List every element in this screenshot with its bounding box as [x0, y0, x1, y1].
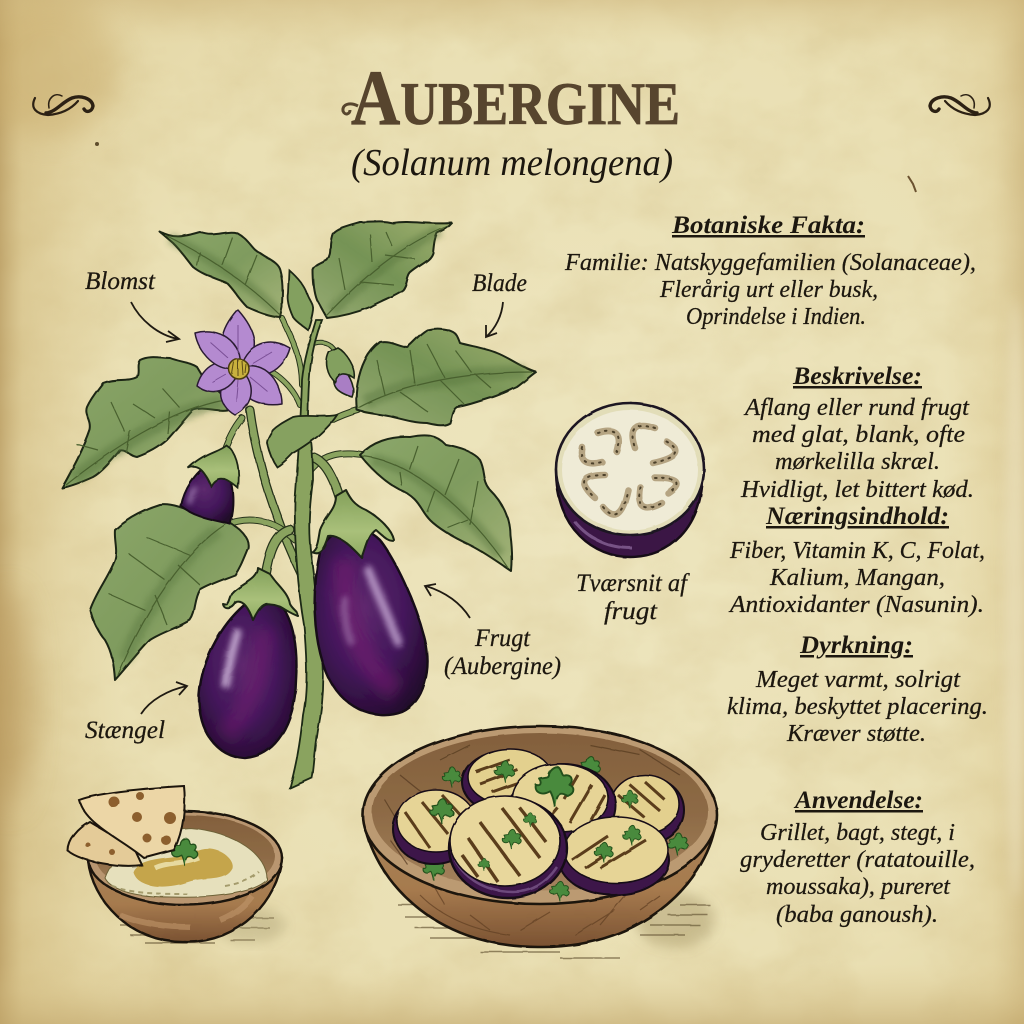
text: Beskrivelse: mørkelilla skræl.: [775, 449, 940, 475]
leaf: lower left: [90, 505, 248, 680]
text: Anvendelse: Grillet, bagt, stegt, i: [760, 820, 955, 846]
text: Botaniske Fakta: Familie: Natskyggefamilien (Solanaceae),: [564, 250, 976, 276]
seeds ring: [581, 426, 676, 514]
flatbread: [68, 822, 142, 866]
flower bud: [327, 348, 354, 397]
main stem: [290, 320, 323, 788]
leaf: lower right: [360, 435, 512, 571]
text: Anvendelse: Anvendelse:: [793, 787, 923, 814]
text: Dyrkning: Dyrkning:: [799, 632, 913, 659]
label: Blomst: Blomst: [85, 268, 156, 295]
title: AUBERGINE: [351, 54, 680, 141]
hummus bowl with flatbread: [68, 786, 285, 943]
text: Beskrivelse: [740, 363, 974, 503]
text: Beskrivelse: med glat, blank, ofte: [752, 422, 965, 448]
text: Beskrivelse: Beskrivelse:: [792, 363, 922, 390]
herb garnish: [172, 838, 198, 866]
text: Anvendelse: [740, 787, 975, 928]
small bowl body: [88, 858, 282, 942]
text: Dyrkning: klima, beskyttet placering.: [727, 694, 988, 720]
slice: right: [610, 775, 684, 843]
flower: [195, 310, 290, 415]
aubergine: large right: [312, 490, 427, 715]
label: Blade: [472, 270, 527, 337]
large bowl rim: [363, 726, 717, 904]
text: Næringsindhold: Næringsindhold:: [765, 503, 949, 530]
label: Stængel: [85, 682, 187, 744]
text: Næringsindhold: Kalium, Mangan,: [769, 565, 945, 591]
slice: top left: [462, 749, 552, 814]
text: Næringsindhold: Antioxidanter (Nasunin).: [728, 592, 984, 618]
leaf: left: [62, 357, 228, 488]
text: Næringsindhold: [728, 503, 985, 618]
label: cross-section: [576, 570, 690, 625]
aubergine: back small: [181, 445, 239, 524]
aubergine: large left: [199, 568, 298, 758]
label: Frugt: (Aubergine): [444, 653, 561, 680]
label: Blade: Blade: [472, 270, 527, 297]
slice: top centre: [510, 764, 616, 848]
leaf: small middle: [267, 415, 337, 467]
text: Dyrkning: [727, 632, 988, 747]
large bowl body: [364, 820, 716, 947]
text: Anvendelse: moussaka), pureret: [766, 874, 951, 900]
slice: lower right: [559, 817, 669, 895]
text: Beskrivelse: Aflang eller rund frugt: [743, 395, 970, 421]
label: Stængel: Stængel: [85, 717, 165, 744]
leaf: small upper: [288, 270, 313, 330]
leaf: top left: [159, 231, 282, 317]
text: Botaniske Fakta: Oprindelse i Indien.: [686, 304, 866, 330]
ornament: right scroll: [930, 95, 990, 115]
text: Dyrkning: Meget varmt, solrigt: [755, 667, 961, 693]
small bowl rim: [88, 811, 282, 905]
label: cross-section: Tværsnit af: [576, 570, 690, 597]
text: Botaniske Fakta: [564, 212, 976, 330]
slice: front: [449, 796, 567, 898]
hummus: [105, 828, 267, 897]
text: Anvendelse: gryderetter (ratatouille,: [740, 847, 975, 873]
leaf: top right: [313, 221, 452, 318]
text: Næringsindhold: Fiber, Vitamin K, C, Folat,: [729, 538, 985, 564]
text: Anvendelse: (baba ganoush).: [776, 902, 938, 928]
label: cross-section: frugt: [604, 598, 658, 625]
text: Botaniske Fakta: Botaniske Fakta:: [671, 212, 865, 239]
large bowl with grilled aubergine: [363, 726, 717, 958]
cross-section of fruit: [556, 403, 704, 557]
label: Frugt: Frugt: [474, 625, 531, 652]
text: Dyrkning: Kræver støtte.: [786, 721, 926, 747]
label: Frugt: [425, 584, 561, 680]
subtitle: (Solanum melongena): [351, 142, 673, 184]
label: Blomst: [85, 268, 179, 342]
stems: [222, 318, 365, 585]
text: Beskrivelse: Hvidligt, let bittert kød.: [740, 477, 974, 503]
plant illustration: [62, 221, 536, 788]
text: Botaniske Fakta: Flerårig urt eller busk,: [659, 277, 878, 303]
herb leaves: [423, 756, 688, 902]
slice: left: [393, 790, 475, 864]
ornament: left scroll: [33, 95, 93, 115]
leaf: right: [356, 329, 536, 425]
